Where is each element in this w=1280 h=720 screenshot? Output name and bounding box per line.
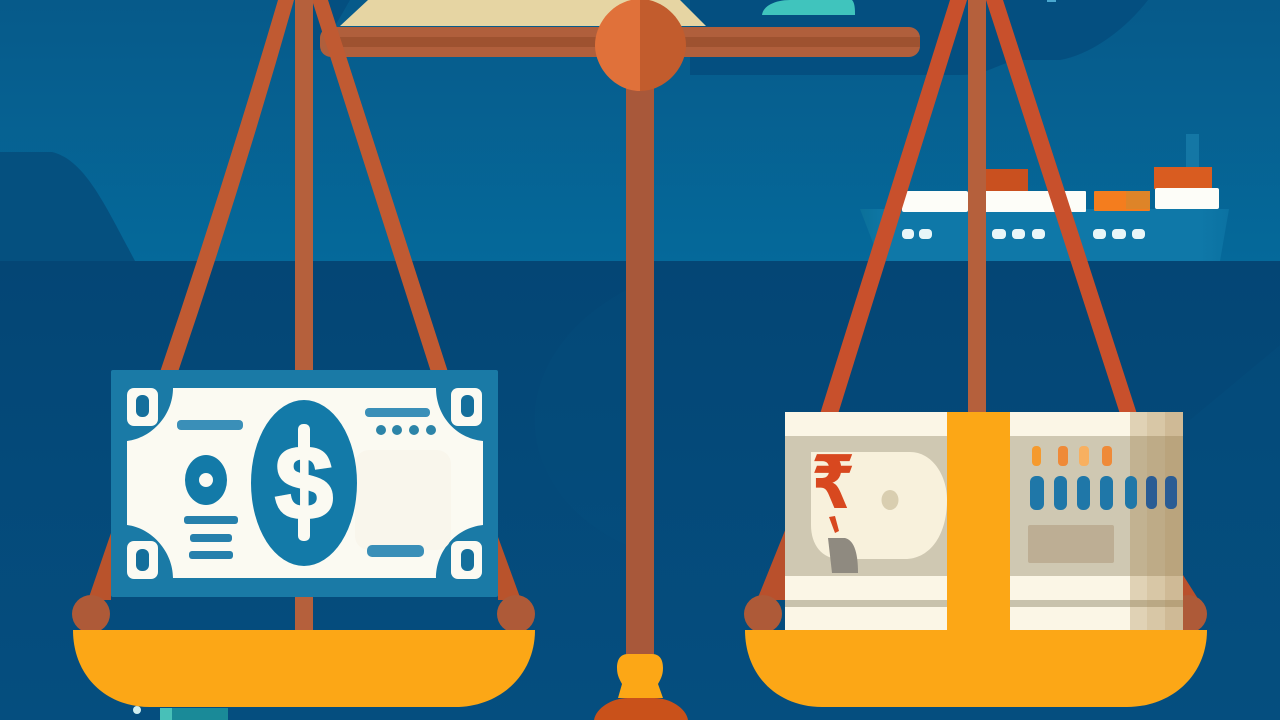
background: dark shape behind beam [690, 0, 1148, 75]
background: faint sea shape right [1190, 345, 1280, 720]
watermark circle [882, 490, 898, 510]
right pan [744, 595, 1207, 707]
bundle stack [785, 412, 1183, 630]
dollar sign: $ [275, 426, 333, 542]
note face band [785, 436, 1183, 576]
centre oval [251, 400, 357, 566]
edge shading [1130, 412, 1183, 630]
teal shapes at bottom [133, 706, 228, 720]
corner ornaments [127, 388, 482, 579]
red mark [829, 516, 839, 533]
background: dark shape left of beam [312, 0, 350, 50]
dollar banknote [111, 370, 498, 597]
orange pills [1032, 446, 1112, 466]
note lines [177, 408, 430, 559]
lower stripe [785, 600, 1183, 607]
ship hull [860, 209, 1229, 261]
pale panel [355, 450, 451, 550]
teal shape at top [762, 0, 855, 15]
rupee sign: ₹ [811, 440, 855, 526]
note border [111, 370, 498, 597]
background: sea [0, 261, 1280, 720]
ship containers [902, 167, 1219, 212]
left pan straps [88, 0, 521, 630]
blue pills [1030, 476, 1177, 510]
scale column [626, 85, 654, 657]
background: sky [0, 0, 1280, 262]
watermark panel [811, 452, 947, 559]
rupee banknote bundle [785, 412, 1183, 630]
tan shape on top of beam [340, 0, 706, 26]
small light mark at top [1047, 0, 1056, 2]
grey patch [828, 538, 858, 573]
tan rectangle [1028, 525, 1114, 563]
right pan straps [757, 0, 1202, 605]
small seal [185, 455, 227, 505]
ship funnel [1186, 134, 1199, 168]
note face [127, 388, 483, 578]
ship windows [902, 229, 1145, 239]
scale base [594, 654, 688, 720]
scale pivot [595, 0, 686, 91]
scale beam [320, 27, 920, 57]
cargo ship [860, 134, 1229, 261]
note dots [376, 425, 436, 435]
background: faint sea shape centre [535, 290, 626, 545]
left pan [72, 595, 535, 707]
background: left hill [0, 152, 135, 261]
paper band [947, 412, 1010, 630]
